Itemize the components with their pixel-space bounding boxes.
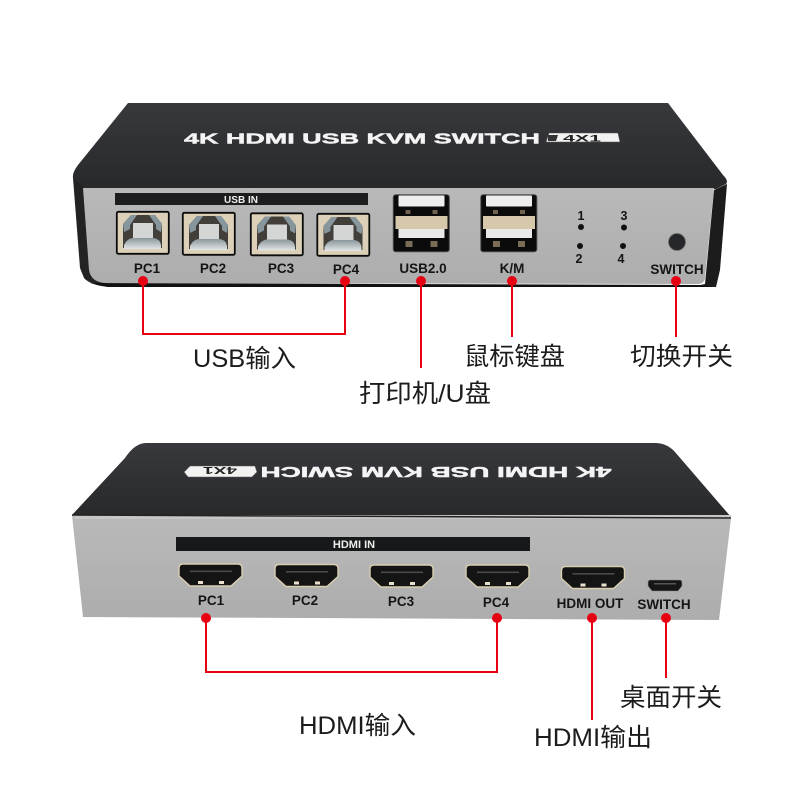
port labels: PC1 bbox=[134, 261, 161, 276]
port labels: PC3 bbox=[388, 594, 415, 609]
port labels: K/M bbox=[500, 261, 524, 276]
top panel bbox=[73, 103, 727, 189]
port: USB-B PC4 bbox=[317, 214, 369, 256]
label bar: HDMI IN bbox=[176, 537, 530, 551]
port labels: PC1 bbox=[198, 593, 225, 608]
port: HDMI OUT bbox=[562, 566, 624, 588]
port labels: PC3 bbox=[268, 261, 295, 276]
label: USB input: USB输入 bbox=[193, 345, 296, 373]
badge: 4X1 rotated bbox=[184, 464, 257, 477]
port labels bbox=[134, 261, 704, 277]
port labels: USB2.0 bbox=[399, 261, 447, 276]
title text rotated: 4K HDMI USB KVM SWICH bbox=[260, 463, 612, 480]
LED indicators: 2 bbox=[576, 252, 583, 266]
LED indicators bbox=[576, 209, 628, 266]
label: printer / U disk: 打印机/U盘 bbox=[359, 380, 491, 408]
LED indicators: 3 bbox=[621, 209, 628, 223]
port labels: PC2 bbox=[200, 261, 226, 276]
callout: switch line bbox=[671, 276, 681, 337]
port labels: HDMI OUT bbox=[557, 596, 624, 611]
label: HDMI input: HDMI输入 bbox=[299, 712, 416, 740]
label: HDMI output: HDMI输出 bbox=[534, 724, 652, 752]
port: USB-B PC1 bbox=[117, 212, 169, 254]
port: USB-B PC2 bbox=[183, 213, 235, 255]
left side edge bbox=[73, 178, 108, 287]
port labels: PC4 bbox=[483, 595, 510, 610]
port: USB-A USB2.0 bbox=[393, 195, 449, 252]
callout: HDMI input bracket bbox=[201, 613, 502, 672]
top panel bbox=[72, 443, 731, 517]
port labels: SWITCH bbox=[650, 262, 704, 277]
port: USB-A K/M bbox=[481, 195, 537, 252]
callout: K/M line bbox=[507, 276, 517, 337]
port labels: PC4 bbox=[333, 262, 360, 277]
callout: USB input bracket bbox=[138, 276, 350, 334]
port: HDMI PC2 bbox=[275, 564, 338, 586]
badge: 4X1 rotated: 4X1 bbox=[202, 464, 237, 475]
device: rear view KVM switch bbox=[72, 443, 731, 620]
button: switch bbox=[668, 234, 686, 250]
port: HDMI PC1 bbox=[179, 564, 242, 586]
title text: 4K HDMI USB KVM SWITCH bbox=[184, 130, 540, 148]
LED indicators: 1 bbox=[578, 209, 585, 223]
badge: 4X1: 4X1 bbox=[563, 134, 601, 144]
badge: 4X1 bbox=[546, 133, 620, 144]
port: micro USB switch bbox=[648, 580, 682, 591]
label: toggle switch: 切换开关 bbox=[630, 343, 733, 371]
right side edge bbox=[696, 184, 727, 287]
front panel bbox=[83, 188, 714, 284]
callout: HDMI output line bbox=[587, 613, 597, 720]
label: mouse keyboard: 鼠标键盘 bbox=[464, 343, 565, 371]
port labels bbox=[198, 593, 691, 612]
label bar: USB IN: USB IN bbox=[224, 195, 258, 206]
port: HDMI PC3 bbox=[370, 565, 433, 587]
LED indicators: 4 bbox=[618, 252, 625, 266]
port: USB-B PC3 bbox=[251, 213, 303, 255]
port labels: SWITCH bbox=[637, 597, 691, 612]
port labels: PC2 bbox=[292, 593, 318, 608]
port: HDMI PC4 bbox=[466, 565, 529, 587]
label bar: USB IN bbox=[115, 193, 368, 206]
callout: desktop switch line bbox=[661, 613, 671, 678]
front panel bbox=[72, 515, 731, 620]
label: desktop switch: 桌面开关 bbox=[620, 684, 722, 712]
device: front view KVM switch bbox=[73, 103, 727, 287]
label bar: HDMI IN: HDMI IN bbox=[333, 539, 375, 551]
callout: USB2.0 line bbox=[416, 276, 426, 368]
